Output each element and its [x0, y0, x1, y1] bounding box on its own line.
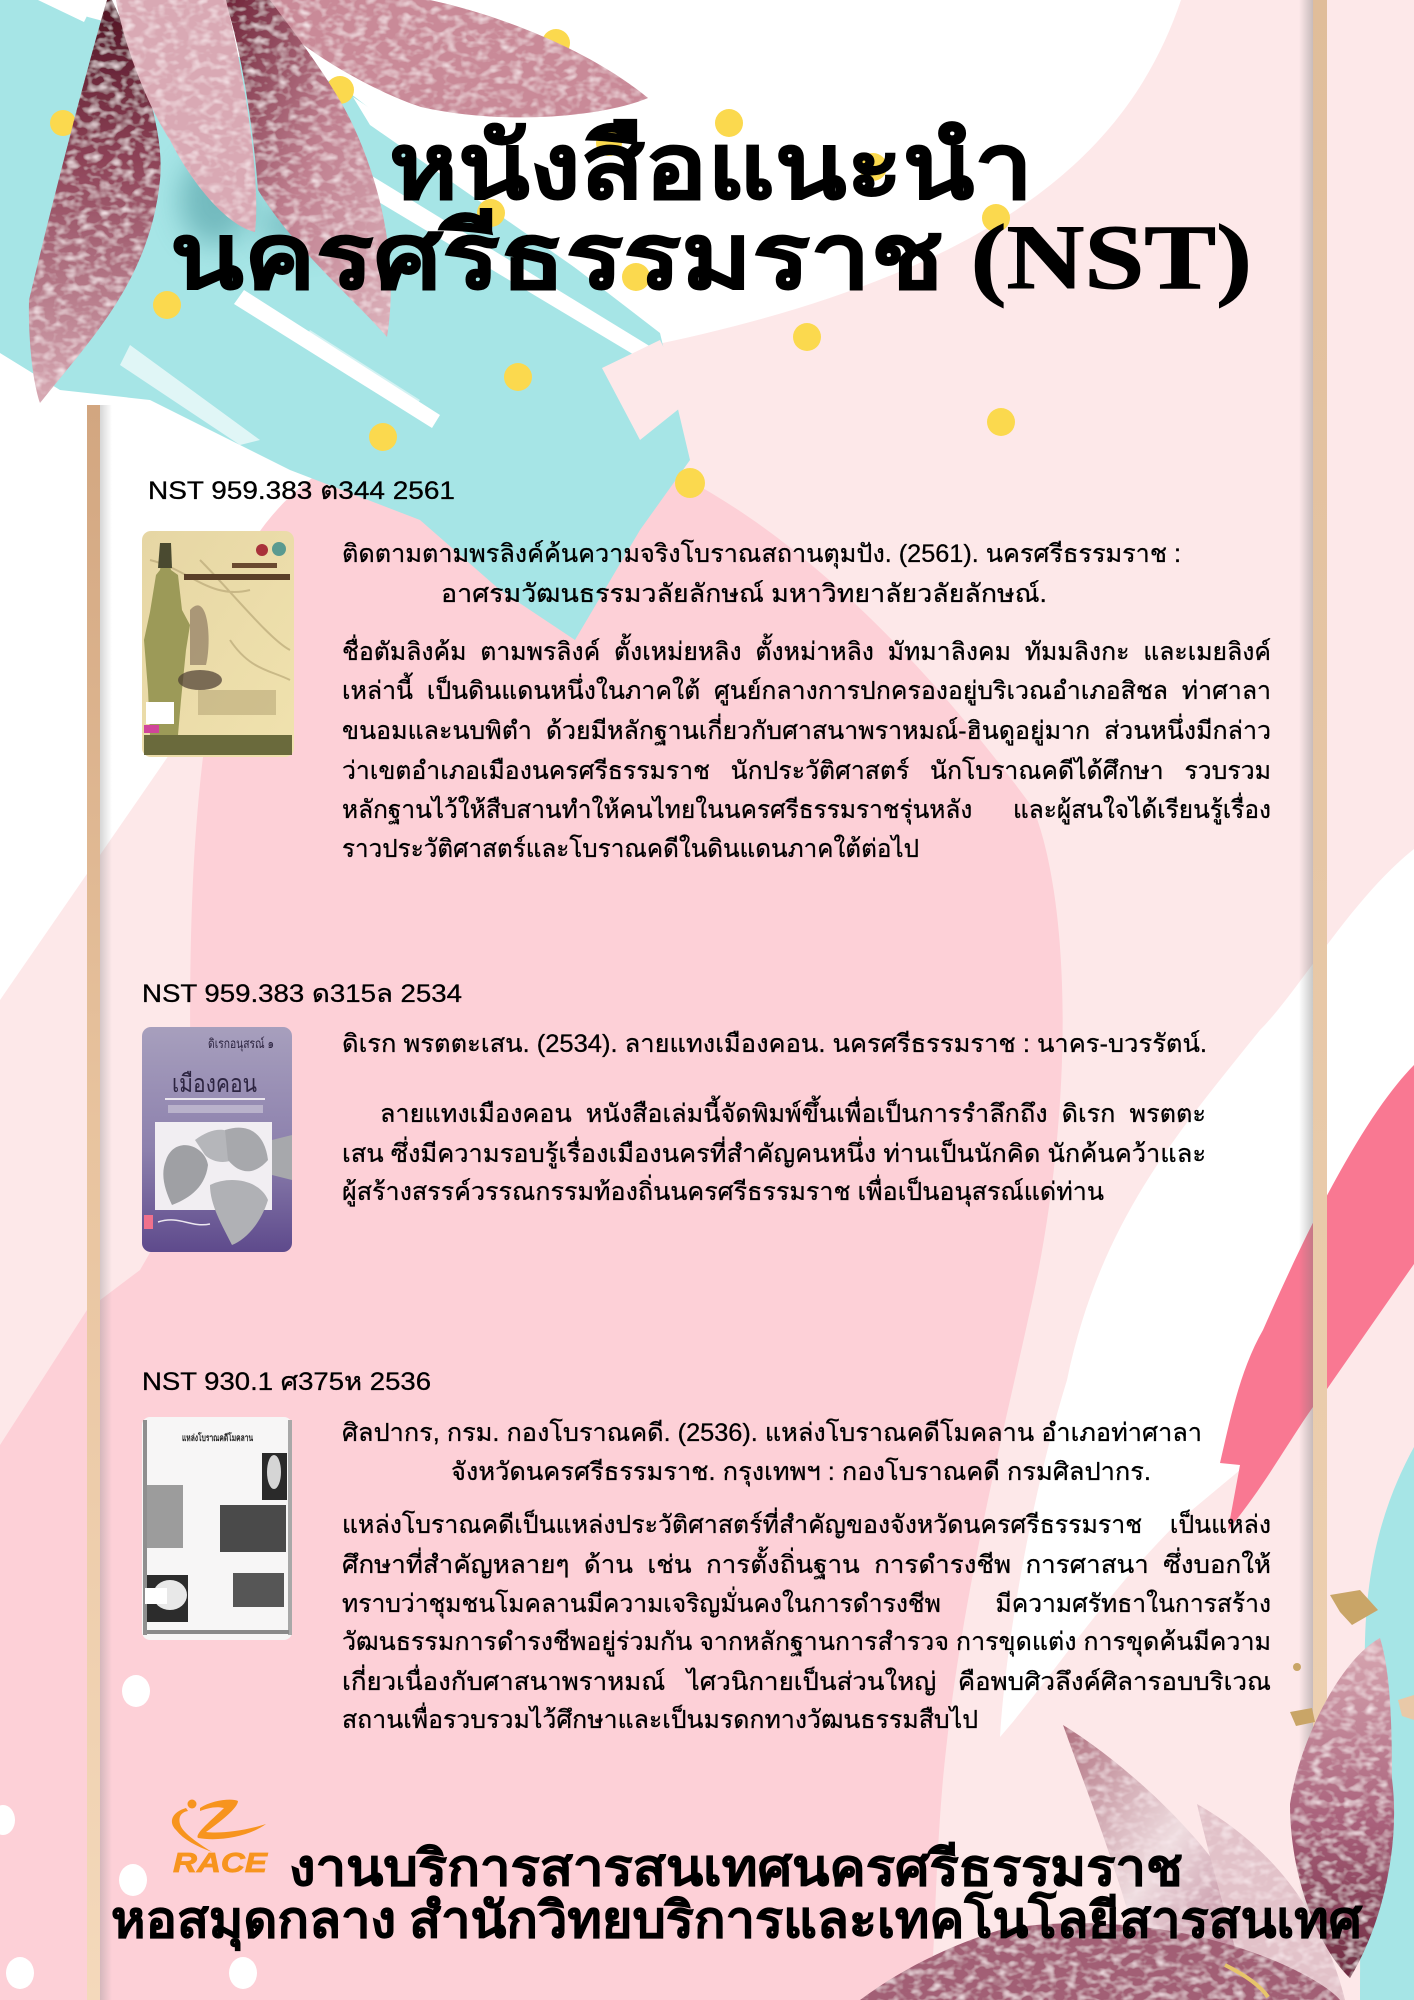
summary 1: [342, 633, 1271, 863]
citation 1: ติดตามตามพรลิงค์ค้นความจริงโบราณสถานตุมปัง. (2561). นครศรีธรรมราช :: [342, 539, 1181, 569]
summary 3: [342, 1507, 1271, 1734]
summary 1: ขนอมและนบพิตำ ด้วยมีหลักฐานเกี่ยวกับศาสนาพราหมณ์-ฮินดูอยู่มาก ส่วนหนึ่งมีกล่าว: [342, 713, 1271, 746]
summary 3: สถานเพื่อรวบรวมไว้ศึกษาและเป็นมรดกทางวัฒนธรรมสืบไป: [342, 1702, 978, 1734]
citation 1: อาศรมวัฒนธรรมวลัยลักษณ์ มหาวิทยาลัยวลัยลักษณ์.: [441, 580, 1047, 608]
citation 2: ดิเรก พรตตะเสน. (2534). ลายแทงเมืองคอน. นครศรีธรรมราช : นาคร-บวรรัตน์.: [342, 1030, 1207, 1058]
footer: งานบริการสารสนเทศนครศรีธรรมราช: [289, 1840, 1183, 1896]
teal shape bottom right: [1360, 1447, 1414, 2000]
call number 3: NST 930.1 ศ375ห 2536: [142, 1368, 431, 1396]
summary 3: ทราบว่าชุมชนโมคลานมีความเจริญมั่นคงในการดำรงชีพ มีความศรัทธาในการสร้าง: [342, 1586, 1271, 1619]
summary 3: วัฒนธรรมการดำรงชีพอยู่ร่วมกัน จากหลักฐานการสำรวจ การขุดแต่ง การขุดค้นมีความ: [342, 1628, 1271, 1657]
summary 2: ผู้สร้างสรรค์วรรณกรรมท้องถิ่นนครศรีธรรมราช เพื่อเป็นอนุสรณ์แด่ท่าน: [342, 1174, 1104, 1207]
summary 1: หลักฐานไว้ให้สืบสานทำให้คนไทยในนครศรีธรรมราชรุ่นหลัง และผู้สนใจได้เรียนรู้เรื่อง: [342, 792, 1271, 825]
summary 1: ว่าเขตอำเภอเมืองนครศรีธรรมราช นักประวัติศาสตร์ นักโบราณคดีได้ศึกษา รวบรวม: [342, 756, 1271, 785]
summary 2: [342, 1095, 1206, 1207]
white dots: [0, 1675, 257, 1989]
summary 3: เกี่ยวเนื่องกับศาสนาพราหมณ์ ไศวนิกายเป็นส่วนใหญ่ คือพบศิวลึงค์ศิลารอบบริเวณ: [342, 1664, 1271, 1696]
summary 1: เหล่านี้ เป็นดินแดนหนึ่งในภาคใต้ ศูนย์กลางการปกครองอยู่บริเวณอำเภอสิชล ท่าศาลา: [342, 672, 1271, 706]
call number 1: NST 959.383 ต344 2561: [148, 477, 455, 505]
leaves and gold flakes bottom right: [860, 1590, 1414, 2000]
summary 2: ลายแทงเมืองคอน หนังสือเล่มนี้จัดพิมพ์ขึ้นเพื่อเป็นการรำลึกถึง ดิเรก พรตตะ: [380, 1095, 1206, 1128]
citation 1: [342, 539, 1181, 608]
book cover 1: [142, 531, 294, 757]
citation 3: [342, 1418, 1202, 1487]
logo: RACE: [172, 1800, 269, 1878]
book cover 2: เมืองคอน: [172, 1070, 257, 1098]
footer: หอสมุดกลาง สำนักวิทยบริการและเทคโนโลยีสารสนเทศ: [111, 1890, 1363, 1951]
book entry 2: [142, 980, 1207, 1252]
yellow dots: [50, 29, 1015, 498]
book cover 3: แหล่งโบราณคดีโมคลาน: [182, 1432, 253, 1444]
footer: [111, 1840, 1363, 1951]
logo: RACE: RACE: [173, 1847, 269, 1878]
title: [170, 116, 1252, 308]
leaves top left: [29, 0, 648, 403]
book cover 3: [142, 1417, 292, 1640]
teal paint strokes top left: [0, 0, 690, 640]
hot pink brush stroke: [1220, 1065, 1414, 1530]
summary 1: ราวประวัติศาสตร์และโบราณคดีในดินแดนภาคใต้ต่อไป: [342, 834, 919, 863]
call number 2: NST 959.383 ด315ล 2534: [142, 980, 462, 1008]
citation 3: จังหวัดนครศรีธรรมราช. กรุงเทพฯ : กองโบราณคดี กรมศิลปากร.: [451, 1457, 1151, 1487]
citation 3: ศิลปากร, กรม. กองโบราณคดี. (2536). แหล่งโบราณคดีโมคลาน อำเภอท่าศาลา: [342, 1418, 1202, 1447]
summary 3: ศึกษาที่สำคัญหลายๆ ด้าน เช่น การตั้งถิ่นฐาน การดำรงชีพ การศาสนา ซึ่งบอกให้: [342, 1546, 1271, 1579]
book entry 1: [142, 477, 1271, 863]
book cover 2: ดิเรกอนุสรณ์ ๑: [208, 1036, 274, 1052]
summary 1: ชื่อตัมลิงค้ม ตามพรลิงค์ ตั้งเหม่ยหลิง ตั้งหม่าหลิง มัทมาลิงคม ทัมมลิงกะ และเมยลิงค์: [342, 633, 1271, 666]
title: นครศรีธรรมราช (NST): [170, 206, 1252, 308]
book entry 3: [142, 1368, 1271, 1734]
title: หนังสือแนะนำ: [389, 116, 1033, 218]
summary 3: แหล่งโบราณคดีเป็นแหล่งประวัติศาสตร์ที่สำคัญของจังหวัดนครศรีธรรมราช เป็นแหล่ง: [342, 1507, 1271, 1539]
book cover 2: [142, 1027, 292, 1252]
summary 2: เสน ซึ่งมีความรอบรู้เรื่องเมืองนครที่สำคัญคนหนึ่ง ท่านเป็นนักคิด นักค้นคว้าและ: [342, 1136, 1206, 1169]
